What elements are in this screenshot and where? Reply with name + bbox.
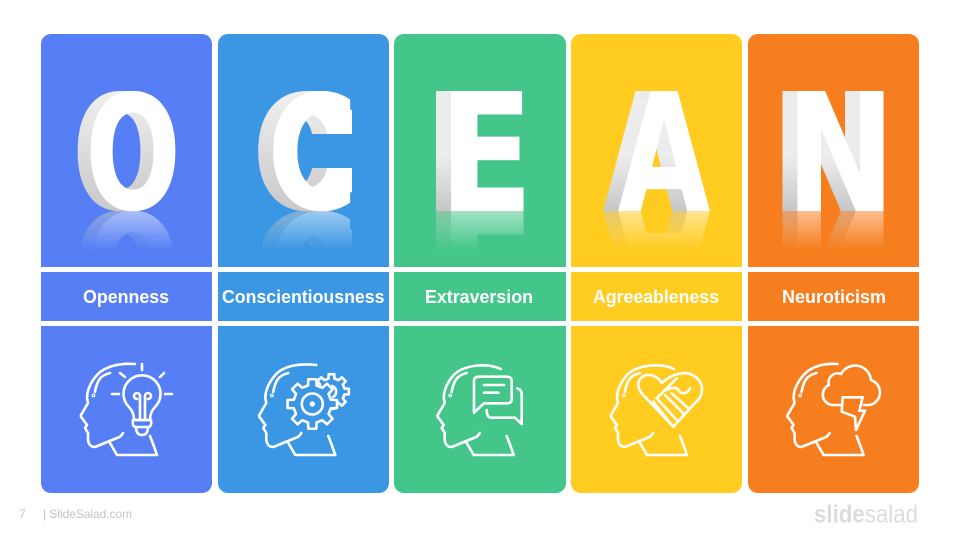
label bar: Extraversion: Extraversion (425, 287, 533, 307)
column: Neuroticism (748, 34, 919, 493)
letter A: A (618, 58, 710, 250)
letter N: N (785, 60, 896, 251)
letter A: A (618, 58, 710, 250)
letter O: O (85, 61, 181, 247)
panel: Agreeableness letter (571, 34, 742, 267)
icon: head with storm cloud (787, 364, 880, 455)
label bar: Neuroticism: Neuroticism (782, 287, 886, 307)
page number: 7 (19, 507, 26, 521)
label bar: Agreeableness (571, 272, 742, 321)
icon: head with light bulb (81, 364, 172, 455)
letter O: O (85, 175, 181, 361)
letter C: C (267, 175, 358, 360)
panel: Conscientiousness letter (218, 34, 389, 267)
panel: Openness letter (41, 34, 212, 267)
panel: Conscientiousness icon (218, 326, 389, 493)
column: Agreeableness (571, 34, 742, 493)
letter C: C (267, 62, 358, 247)
label bar: Openness: Openness (83, 287, 169, 307)
footer source text: | SlideSalad.com (43, 507, 132, 521)
panel: Extraversion icon (394, 326, 566, 493)
column: Openness (41, 34, 212, 493)
letter E: E (438, 171, 534, 363)
letter N: N (785, 171, 896, 362)
logo: slidesalad: slidesalad (814, 500, 918, 528)
letter O: O (85, 175, 181, 361)
label bar: Extraversion (394, 272, 566, 321)
label bar: Agreeableness: Agreeableness (593, 287, 719, 307)
letter O: O (85, 61, 181, 247)
letter E: E (438, 59, 534, 251)
letter E: E (438, 171, 534, 363)
letter N: N (785, 60, 896, 251)
label bar: Conscientiousness (218, 272, 389, 321)
panel: Openness icon (41, 326, 212, 493)
label bar: Conscientiousness: Conscientiousness (222, 287, 384, 307)
letter A: A (618, 172, 710, 364)
letter A: A (618, 172, 710, 364)
letter E: E (438, 59, 534, 251)
panel: Neuroticism letter (748, 34, 919, 267)
letter C: C (267, 62, 358, 247)
column: Conscientiousness (218, 34, 389, 493)
letter C: C (267, 175, 358, 360)
label bar: Neuroticism (748, 272, 919, 321)
panel: Neuroticism icon (748, 326, 919, 493)
label bar: Openness (41, 272, 212, 321)
column: Extraversion (394, 34, 566, 493)
panel: Agreeableness icon (571, 326, 742, 493)
panel: Extraversion letter (394, 34, 566, 267)
icon: head with handshake heart (611, 365, 702, 455)
icon: head with speech bubbles (438, 365, 522, 455)
icon: head with gears (259, 364, 349, 455)
letter N: N (785, 171, 896, 362)
